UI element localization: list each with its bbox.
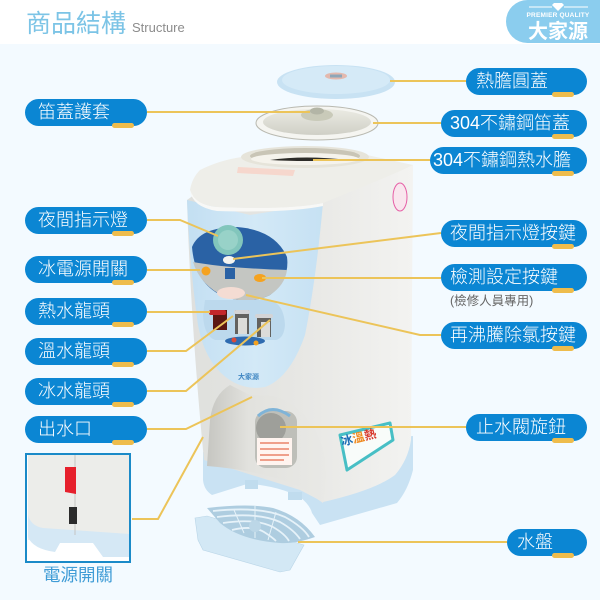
- product sticker: [339, 423, 393, 470]
- label: night light button: 夜間指示燈按鍵: [450, 223, 576, 243]
- note: service personnel only: (檢修人員專用): [450, 294, 533, 308]
- cover lower rim: [190, 190, 323, 211]
- water outlet niche: [207, 385, 326, 503]
- lid: thermal tank round cover: [277, 65, 395, 99]
- subtitle: Structure: [132, 20, 185, 35]
- dispenser base: [203, 436, 413, 525]
- warning labels: [237, 167, 407, 211]
- label: cold tap: 冰水龍頭: [38, 381, 110, 401]
- label: stop valve knob: 止水閥旋鈕: [476, 417, 566, 437]
- dispenser body: [187, 155, 413, 502]
- label: reboil button: [441, 322, 587, 349]
- label: flute lid sleeve: [25, 99, 147, 126]
- brand mark on body: 大家源: [238, 372, 259, 381]
- brand logo: PREMIER QUALITY: [527, 12, 589, 19]
- label: hot tap: 熱水龍頭: [38, 301, 110, 321]
- label: ice power switch: [25, 256, 147, 283]
- label: warm tap: [25, 338, 147, 365]
- title: 商品結構: [26, 10, 126, 38]
- label: cold tap: [25, 378, 147, 405]
- stainless steel lid: [256, 106, 378, 140]
- label: night light button: [441, 220, 587, 247]
- stop valve knob: [255, 410, 297, 468]
- inset: power switch detail: [25, 453, 131, 563]
- label: thermal tank cover: 熱膽圓蓋: [476, 71, 548, 91]
- label: stainless lid: [441, 110, 587, 137]
- top cover: [190, 155, 413, 208]
- label: stop valve knob: [466, 414, 587, 441]
- water tray: [195, 506, 315, 572]
- inset caption: 電源開關: [43, 565, 113, 585]
- label: test setting button: 檢測設定按鍵: [450, 267, 558, 287]
- connector lines: [132, 81, 507, 542]
- label: water outlet: 出水口: [38, 419, 92, 439]
- brand logo: 大家源: [528, 21, 588, 43]
- label: night light: [25, 207, 147, 234]
- label: warm tap: 溫水龍頭: [38, 341, 110, 361]
- brand logo: [506, 0, 600, 43]
- label: water tray: [507, 529, 587, 556]
- label: thermal tank cover: [466, 68, 587, 95]
- label: stainless tank: 304不鏽鋼熱水膽: [433, 150, 571, 170]
- label: water tray: 水盤: [517, 532, 553, 552]
- faucet recess: [203, 300, 285, 346]
- label: flute lid sleeve: 笛蓋護套: [38, 102, 110, 122]
- label: test setting button: [441, 264, 587, 291]
- product sticker: 冰溫熱: [339, 426, 378, 449]
- label: reboil button: 再沸騰除氯按鍵: [450, 325, 576, 345]
- label: night light: 夜間指示燈: [38, 210, 128, 230]
- label: ice power switch: 冰電源開關: [38, 259, 128, 279]
- label: hot tap: [25, 298, 147, 325]
- water tank opening: [241, 146, 369, 168]
- label: water outlet: [25, 416, 147, 443]
- front blue panel: [187, 200, 323, 388]
- label: stainless lid: 304不鏽鋼笛蓋: [450, 113, 570, 133]
- control panel: [192, 225, 287, 301]
- header band: [0, 0, 600, 44]
- label: stainless tank: [430, 147, 587, 174]
